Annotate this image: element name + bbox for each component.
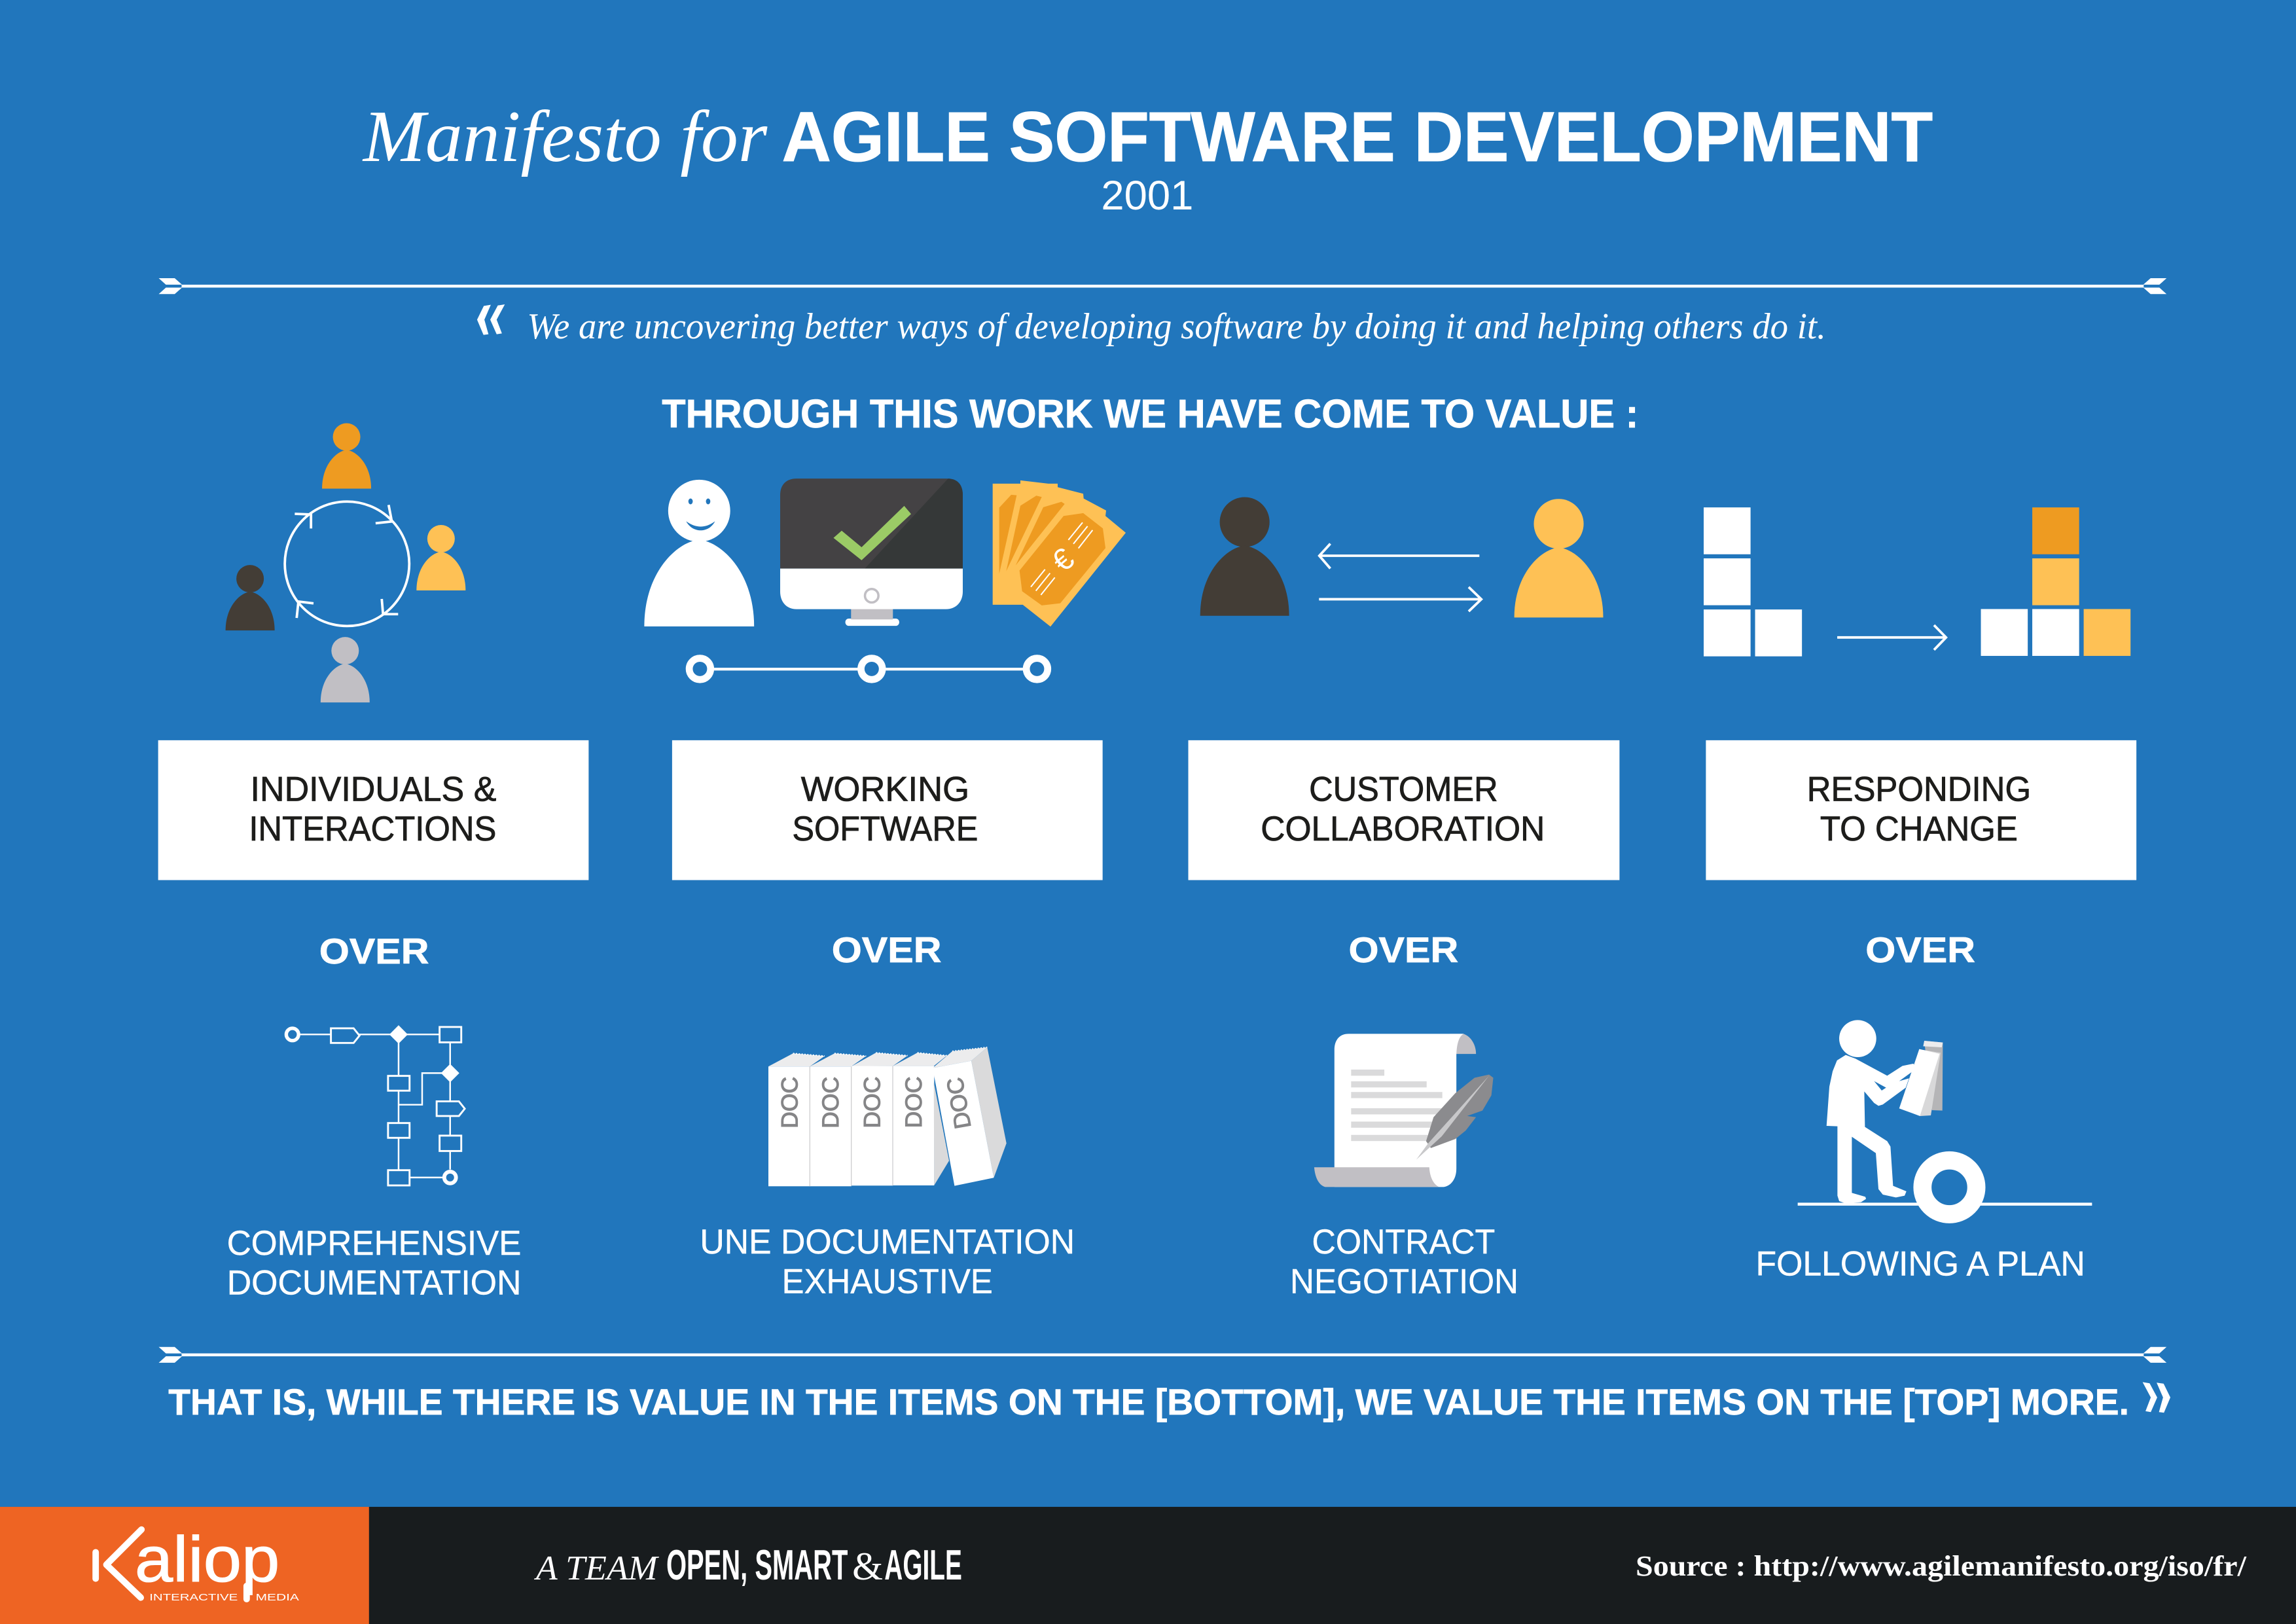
circular arrows <box>285 501 409 626</box>
feather <box>1416 1075 1494 1160</box>
panel: responding to change: RESPONDING <box>1807 770 2031 809</box>
panel: customer collaboration: COLLABORATION <box>1261 810 1545 848</box>
icon: customer collaboration <box>1200 497 1604 617</box>
icon: individuals and interactions <box>226 424 465 702</box>
logo tagline: interactive: INTERACTIVE <box>149 1593 238 1603</box>
ground line <box>1798 1202 2092 1206</box>
timeline <box>689 659 1048 679</box>
caption: une documentation exhaustive <box>700 1223 1075 1301</box>
scroll bottom roll <box>1314 1167 1439 1187</box>
blocks before <box>1704 507 1802 657</box>
caption: following a plan: FOLLOWING A PLAN <box>1755 1245 2085 1284</box>
caption: une documentation exhaustive: EXHAUSTIVE <box>782 1262 993 1301</box>
scroll curl <box>1450 1034 1476 1054</box>
binder labels: DOC <box>859 1077 885 1128</box>
top arrow divider <box>159 278 2166 294</box>
source credit: Source : http://www.agilemanifesto.org/iso/fr/ <box>1636 1549 2247 1582</box>
scroll body <box>1335 1034 1463 1187</box>
footer slogan: AGILE <box>884 1541 962 1589</box>
subheading: THROUGH THIS WORK WE HAVE COME TO VALUE : <box>662 391 1638 437</box>
panel: working software: SOFTWARE <box>792 810 978 848</box>
footer bar <box>0 1507 2296 1624</box>
caption: comprehensive documentation <box>227 1224 521 1303</box>
icon: process flowchart <box>286 1026 465 1185</box>
panel: working software: WORKING <box>801 770 969 809</box>
monitor with check mark <box>780 478 963 626</box>
over label 2: OVER <box>832 929 942 970</box>
panel: individuals and interactions: INTERACTIONS <box>249 810 496 848</box>
caption: contract negotiation: CONTRACT <box>1312 1223 1495 1261</box>
contract text lines <box>1351 1070 1444 1141</box>
quote text: We are uncovering better ways of developing software by doing it and helping others do it. <box>527 306 1826 347</box>
closing statement: THAT IS, WHILE THERE IS VALUE IN THE ITEMS ON THE [BOTTOM], WE VALUE THE ITEMS ON THE [TOP] MORE. <box>168 1381 2129 1422</box>
logo wordmark: aliop <box>135 1523 279 1595</box>
person: grey <box>321 637 370 702</box>
banknotes with euro sign: € <box>1045 541 1081 579</box>
panel: responding to change <box>1706 740 2136 880</box>
panel: customer collaboration: CUSTOMER <box>1309 770 1498 809</box>
caption: contract negotiation: NEGOTIATION <box>1290 1262 1518 1301</box>
icon: stack of documentation binders <box>768 1047 1007 1186</box>
banknotes with euro sign <box>993 480 1126 626</box>
binder labels: DOC <box>777 1077 802 1128</box>
exchange arrows <box>1319 544 1481 611</box>
panel: individuals and interactions: INDIVIDUALS & <box>251 770 496 809</box>
icon: working software <box>644 478 1126 679</box>
person: dark customer <box>1200 497 1289 616</box>
blocks after <box>1981 507 2130 656</box>
transition arrow <box>1837 625 1946 650</box>
person: yellow <box>416 525 465 590</box>
binder labels: DOC <box>942 1075 977 1131</box>
over label 3: OVER <box>1349 929 1458 970</box>
binder shapes <box>768 1047 1007 1186</box>
icon: contract scroll with feather <box>1314 1034 1494 1187</box>
person: yellow partner <box>1515 499 1604 617</box>
title <box>362 96 1933 177</box>
logo tagline: media: MEDIA <box>256 1593 300 1603</box>
binder labels: DOC <box>901 1076 927 1128</box>
footer slogan: OPEN, SMART <box>666 1541 848 1589</box>
binder labels <box>777 1075 977 1131</box>
panel: working software <box>672 740 1103 880</box>
wheel <box>1922 1161 1977 1214</box>
caption: une documentation exhaustive: UNE DOCUMENTATION <box>700 1223 1075 1261</box>
person: orange <box>322 424 371 489</box>
binder labels: DOC <box>818 1077 844 1128</box>
person: dark <box>226 565 275 630</box>
plan document <box>1899 1041 1943 1116</box>
logo mark <box>96 1530 247 1599</box>
walking person <box>1827 1020 1916 1203</box>
caption: comprehensive documentation: COMPREHENSIVE <box>227 1224 521 1263</box>
footer slogan <box>534 1541 962 1589</box>
over label 1: OVER <box>319 931 429 971</box>
icon: closing quotation mark <box>2143 1382 2170 1413</box>
over label 4: OVER <box>1865 929 1975 970</box>
icon: opening quotation mark <box>477 304 505 335</box>
footer slogan: & <box>852 1545 883 1589</box>
icon: responding to change <box>1704 507 2130 657</box>
panel: customer collaboration <box>1189 740 1619 880</box>
footer slogan: A TEAM <box>534 1549 660 1587</box>
title: AGILE SOFTWARE DEVELOPMENT <box>782 98 1933 176</box>
bottom arrow divider <box>159 1347 2166 1363</box>
year: 2001 <box>1101 173 1193 219</box>
caption: comprehensive documentation: DOCUMENTATION <box>227 1264 521 1303</box>
panel: individuals and interactions <box>158 740 588 880</box>
caption: contract negotiation <box>1290 1223 1518 1301</box>
logo: Kaliop <box>96 1523 300 1603</box>
title: Manifesto for <box>362 96 768 177</box>
panel: responding to change: TO CHANGE <box>1820 810 2018 848</box>
icon: person following a plan <box>1798 1020 2092 1214</box>
smiling person <box>644 480 754 626</box>
